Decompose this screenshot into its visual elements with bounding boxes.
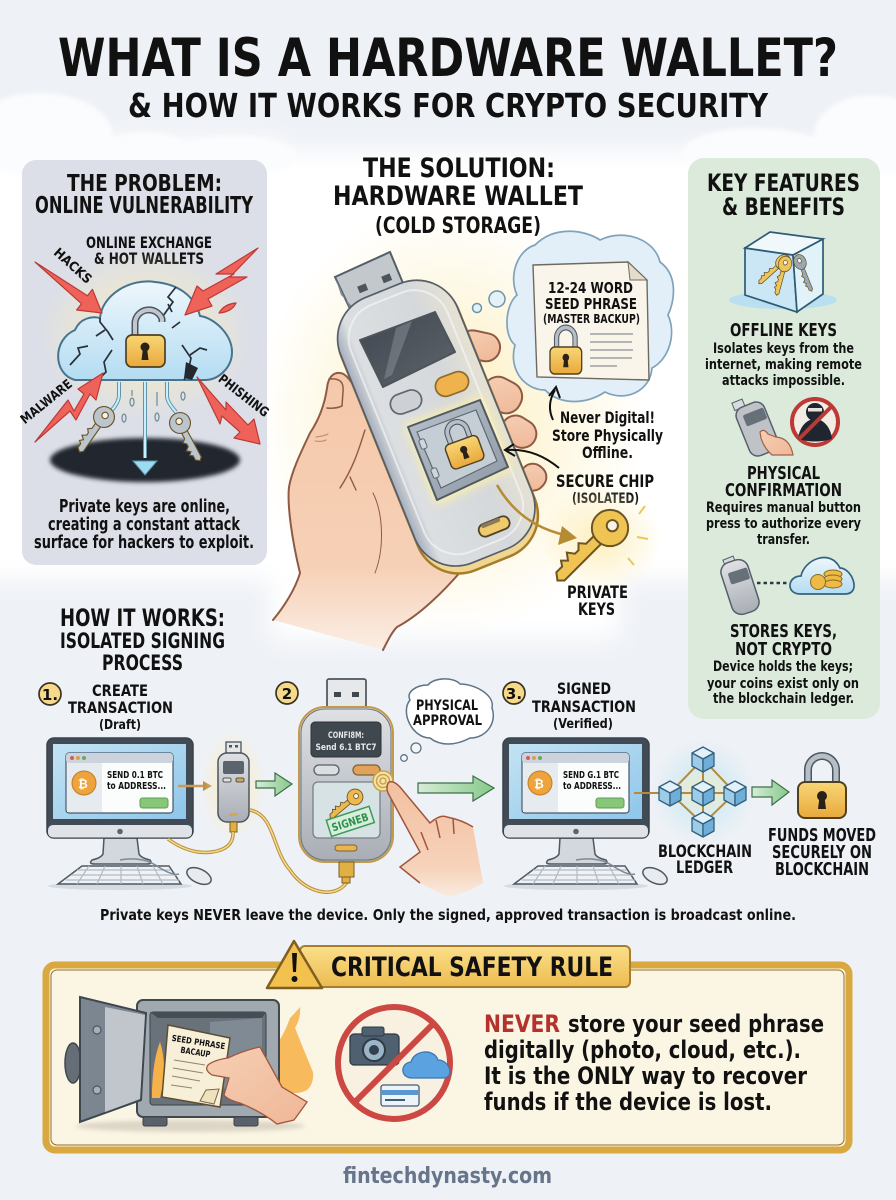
seed phrase paper: BACAUP [180, 1046, 211, 1060]
features heading [707, 169, 860, 221]
palm and thumb [273, 373, 500, 650]
step 1 badge [39, 683, 61, 705]
black hole [50, 438, 240, 482]
arrow to device [178, 781, 212, 791]
flames [276, 1007, 313, 1093]
offline keys text: OFFLINE KEYS [730, 320, 837, 341]
safety rule text: funds if the device is lost. [484, 1088, 772, 1116]
computer with draft transaction: ₿ [78, 777, 88, 791]
safety panel frame [46, 965, 849, 1150]
stolen keys [71, 402, 209, 466]
solution heading: HARDWARE WALLET [333, 181, 583, 212]
problem description: Private keys are online, [59, 496, 230, 517]
computer with signed transaction: SEND G.1 BTC [563, 770, 619, 781]
step 1 title: TRANSACTION [68, 698, 173, 717]
panel: the solution [273, 153, 673, 650]
camera [350, 1027, 399, 1065]
private key icon [545, 502, 648, 593]
blockchain label [658, 842, 752, 878]
hardware wallet device [324, 252, 551, 587]
glow behind cloud [41, 250, 251, 420]
solution heading [333, 153, 583, 239]
green arrow [256, 773, 292, 796]
icon: warning triangle [267, 941, 322, 988]
seed phrase document: (MASTER BACKUP) [543, 312, 640, 326]
safety banner: CRITICAL SAFETY RULE [331, 952, 613, 983]
computer with signed transaction [503, 738, 670, 890]
secure chip label: (ISOLATED) [572, 491, 639, 507]
never digital note [552, 408, 663, 462]
open padlock [126, 310, 165, 367]
problem description: surface for hackers to exploit. [34, 532, 254, 553]
panel background [22, 160, 267, 565]
solution heading: (COLD STORAGE) [375, 214, 541, 239]
physical approval bubble [401, 679, 493, 761]
private keys label: PRIVATE [567, 583, 628, 603]
problem description [34, 496, 254, 553]
blockchain network [634, 740, 755, 844]
secure chip label [556, 472, 654, 507]
step 1 title: CREATE [92, 681, 148, 700]
never digital note: Offline. [582, 443, 633, 462]
icon: no digital storage [338, 1007, 450, 1119]
physical approval bubble: PHYSICAL [416, 698, 478, 714]
seed phrase paper: SEED PHRASE [171, 1034, 226, 1052]
blockchain label: BLOCKCHAIN [658, 842, 752, 862]
private keys label [567, 583, 628, 620]
safety banner [300, 946, 630, 987]
step 3 [503, 679, 876, 890]
attack labels: HACKS [50, 245, 94, 287]
step 3 badge [503, 682, 525, 704]
stores keys text: the blockchain ledger. [713, 691, 854, 707]
exchange label [86, 233, 212, 268]
step 1 [39, 681, 347, 892]
stores keys text: NOT CRYPTO [735, 639, 832, 660]
safety rule text [484, 1010, 824, 1116]
never digital arrow [549, 387, 560, 420]
step 3 badge: 3. [506, 685, 522, 703]
hand holding device [273, 328, 551, 650]
short green arrow [752, 780, 789, 805]
computer with signed transaction: ₿ [534, 777, 544, 791]
seed phrase document: SEED PHRASE [545, 295, 637, 313]
seed phrase paper [162, 1025, 230, 1107]
prohibition slash [354, 1023, 434, 1103]
step 2 badge: 2 [282, 685, 292, 703]
large device with confirmation screen: CONFI8M: [328, 731, 364, 741]
exchange label: & HOT WALLETS [94, 249, 204, 268]
device slot [477, 514, 511, 538]
seed phrase document [533, 262, 649, 380]
step 3 title [532, 679, 636, 732]
stores keys text: Device holds the keys; [713, 659, 853, 675]
title: & HOW IT WORKS FOR CRYPTO SECURITY [128, 86, 769, 125]
seed phrase document: 12-24 WORD [548, 279, 633, 297]
title [58, 28, 838, 125]
gold arrow to key [497, 485, 577, 545]
device body [324, 267, 551, 587]
physical confirmation text: transfer. [757, 532, 810, 548]
computer with signed transaction: to ADDRESS... [563, 781, 621, 792]
features background [688, 158, 880, 719]
never digital note: Store Physically [552, 426, 663, 445]
footer website: fintechdynasty.com [343, 1164, 552, 1189]
cracked cloud [58, 281, 232, 380]
cloud [403, 1052, 450, 1078]
open safe with seed phrase [65, 997, 313, 1132]
private key glow [538, 485, 662, 595]
step 2 badge [276, 682, 298, 704]
how it works heading: PROCESS [102, 651, 183, 675]
problem heading [35, 171, 253, 219]
large device with confirmation screen: SIGNEB [330, 810, 370, 835]
problem heading: ONLINE VULNERABILITY [35, 193, 253, 219]
leak arrow and data streams [110, 382, 185, 475]
physical confirmation text: PHYSICAL [747, 463, 820, 484]
physical confirmation text: CONFIRMATION [725, 480, 842, 501]
secure chip label: SECURE CHIP [556, 472, 654, 492]
solution heading: THE SOLUTION: [363, 153, 555, 184]
private keys label: KEYS [578, 600, 615, 620]
safe door [65, 997, 146, 1122]
features heading: & BENEFITS [722, 193, 845, 221]
stores keys text [707, 621, 859, 707]
attack labels: PHISHING [215, 372, 271, 421]
panel: how it works [39, 604, 876, 924]
never digital note: Never Digital! [560, 408, 655, 427]
physical confirmation text [706, 463, 861, 548]
panel: key features and benefits [688, 158, 880, 719]
funds padlock [798, 756, 846, 818]
large device with confirmation screen: Send 6.1 BTC7 [316, 743, 376, 753]
cables [168, 810, 347, 892]
how it works heading: ISOLATED SIGNING [60, 629, 225, 653]
stores keys text: your coins exist only on [707, 676, 859, 692]
attack labels [18, 245, 271, 428]
thought circles [472, 291, 505, 312]
card [381, 1085, 419, 1106]
attack labels: MALWARE [18, 377, 76, 428]
offline keys text: Isolates keys from the [713, 341, 854, 357]
stores keys text: STORES KEYS, [730, 621, 837, 642]
offline keys text [705, 320, 862, 389]
step 1 badge: 1. [42, 686, 58, 704]
hand placing paper [207, 1047, 307, 1124]
step 2 [276, 679, 494, 897]
how it works heading: HOW IT WORKS: [60, 604, 225, 632]
offline keys text: attacks impossible. [722, 373, 845, 389]
step 3 title: TRANSACTION [532, 697, 636, 716]
computer with draft transaction: to ADDRESS... [107, 781, 166, 792]
safety rule text: NEVER [484, 1010, 560, 1038]
step 1 title [68, 681, 173, 733]
physical approval bubble: APPROVAL [413, 713, 482, 729]
panel: critical safety rule [46, 941, 849, 1150]
device screen [360, 312, 455, 387]
back fingers [456, 328, 551, 495]
usb connector [335, 252, 405, 313]
blockchain label: LEDGER [676, 858, 733, 878]
problem description: creating a constant attack [48, 514, 241, 535]
pointing hand with fingerprint [373, 771, 483, 897]
funds moved label [768, 825, 876, 880]
safety rule text: digitally (photo, cloud, etc.). [484, 1036, 801, 1064]
large device with confirmation screen [299, 679, 393, 883]
computer with draft transaction [47, 738, 214, 890]
safety rule text: It is the ONLY way to recover [484, 1062, 807, 1090]
step 1 title: (Draft) [99, 717, 141, 733]
computer with draft transaction: SEND 0.1 BTC [107, 770, 163, 781]
small device [201, 729, 265, 841]
icon: keys on device, coins in cloud [718, 556, 854, 617]
secure chip arrow [505, 444, 559, 468]
long green arrow [418, 776, 494, 801]
problem heading: THE PROBLEM: [67, 171, 222, 197]
safety rule text: store your seed phrase [568, 1010, 824, 1038]
how it works heading [60, 604, 225, 675]
device buttons [388, 369, 471, 417]
safe body [75, 1000, 305, 1132]
seed phrase thought bubble [472, 231, 673, 402]
step 3 title: SIGNED [557, 679, 611, 698]
step 3 title: (Verified) [553, 716, 613, 732]
exchange label: ONLINE EXCHANGE [86, 233, 212, 252]
icon: device press and no hacker [732, 399, 838, 459]
secure chip safe [405, 396, 512, 505]
icon: keys in ice cube [729, 232, 837, 312]
hand outline and creases [273, 373, 462, 650]
attack arrows [35, 248, 260, 444]
panel: the problem [18, 160, 271, 565]
cloud bubble [507, 231, 673, 402]
